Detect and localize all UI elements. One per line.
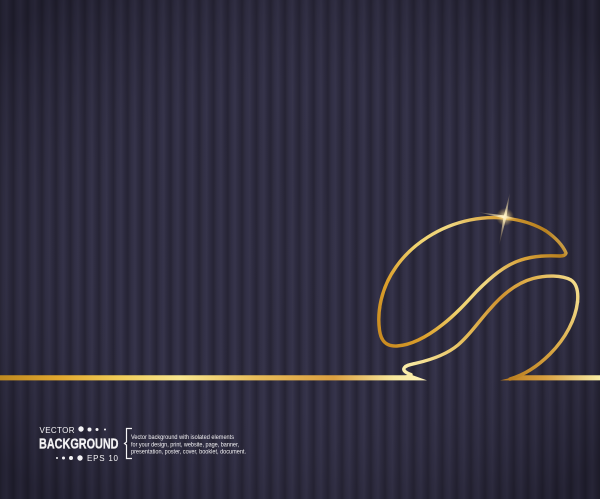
upper half of bean [379, 218, 566, 346]
bracket [124, 428, 132, 458]
logo block [39, 426, 246, 463]
eps label: EPS 10 [87, 454, 119, 463]
lower half of bean [404, 276, 578, 375]
description text: Vector background with isolated elements [131, 434, 234, 441]
left horizontal gold line [0, 375, 427, 380]
vector label: VECTOR [40, 426, 75, 435]
background heading: BACKGROUND [39, 437, 118, 453]
description text: presentation, poster, cover, booklet, document. [131, 448, 246, 456]
description text: for your design, print, website, page, banner, [131, 442, 239, 448]
top dots [78, 426, 106, 432]
bottom dots [56, 455, 83, 461]
icon: sparkle [477, 192, 518, 246]
lower bean right side [510, 302, 578, 379]
description text [131, 434, 246, 456]
gold line with coffee bean [0, 218, 600, 380]
right horizontal gold line [500, 375, 600, 380]
